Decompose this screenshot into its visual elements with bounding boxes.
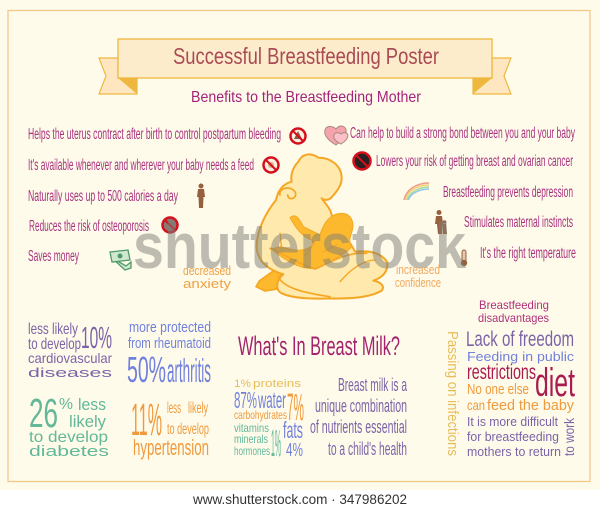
breast milk description: of nutrients essential: [310, 417, 407, 437]
disadvantages word cloud: diet: [535, 361, 575, 405]
left benefits list: [28, 126, 281, 265]
icon: money: [110, 250, 131, 270]
disadvantages word cloud: for breastfeeding: [467, 429, 559, 444]
stat: rheumatoid arthritis: more protected: [129, 319, 211, 336]
disadvantages heading: disadvantages: [478, 311, 549, 325]
stat: cardiovascular diseases: cardiovascular: [28, 350, 112, 366]
watermark: shutterstock: [133, 210, 466, 282]
milk composition word cloud: hormones: [234, 444, 270, 458]
mother and baby illustration: [256, 154, 387, 299]
stat: cardiovascular diseases: [28, 320, 113, 380]
stat: rheumatoid arthritis: from rheumatoid: [128, 335, 211, 352]
milk composition word cloud: [234, 378, 304, 465]
left benefits list: Naturally uses up to 500 calories a day: [28, 188, 178, 205]
stat: hypertension: hypertension: [133, 435, 209, 460]
footer credit: www.shutterstock.com · 347986202: [192, 492, 407, 507]
left benefits list: Saves money: [28, 248, 79, 265]
label: increased confidence: [395, 262, 441, 290]
stat: cardiovascular diseases: diseases: [28, 365, 113, 380]
stat: hypertension: less: [167, 400, 181, 417]
milk composition word cloud: 1%: [234, 378, 251, 390]
breast milk description: Breast milk is a: [338, 375, 408, 395]
stat: cardiovascular diseases: 10%: [81, 320, 112, 355]
label: decreased anxiety: [183, 263, 232, 291]
stat: diabetes: to develop: [29, 429, 108, 446]
milk composition word cloud: water: [258, 387, 286, 413]
milk composition word cloud: carbohydrates: [234, 408, 287, 422]
stat: cardiovascular diseases: to develop: [28, 336, 81, 353]
label: increased confidence: increased: [396, 262, 440, 277]
stat: diabetes: diabetes: [29, 443, 109, 460]
icon: thermometer: [461, 250, 467, 266]
disadvantages word cloud: It is more difficult: [467, 414, 558, 429]
label: decreased anxiety: decreased: [183, 263, 231, 278]
disadvantages word cloud: feed the baby: [487, 397, 574, 414]
disadvantages word cloud: restrictions: [467, 361, 536, 384]
milk composition word cloud: 87%: [234, 387, 257, 413]
icon: no osteoporosis: [162, 218, 178, 232]
label: decreased anxiety: anxiety: [183, 276, 232, 291]
disadvantages word cloud: Feeding in public: [467, 349, 575, 364]
disadvantages word cloud: mothers to return: [467, 444, 561, 459]
stat: hypertension: 11%: [131, 394, 162, 445]
left benefits list: Helps the uterus contract after birth to control postpartum bleeding: [28, 126, 281, 143]
stat: diabetes: likely: [69, 412, 106, 431]
breast milk description: to a child's health: [328, 439, 407, 459]
left benefits list: It's available whenever and wherever your baby needs a feed: [28, 157, 254, 174]
milk composition word cloud: vitamins: [234, 421, 269, 435]
icon: no bleeding: [290, 128, 306, 144]
stat: rheumatoid arthritis: [127, 319, 211, 390]
right benefits list: [350, 125, 576, 262]
disadvantages word cloud: Passing on infections: [444, 331, 461, 456]
stat: hypertension: likely: [188, 400, 208, 417]
milk composition word cloud: proteins: [253, 378, 302, 390]
stat: diabetes: less: [78, 395, 106, 414]
milk composition word cloud: fats: [283, 417, 303, 443]
title ribbon: [99, 39, 511, 94]
stat: diabetes: %: [59, 396, 73, 413]
heading: what's in breast milk: What's In Breast Milk?: [238, 331, 400, 361]
milk composition word cloud: 1%: [271, 423, 281, 465]
disadvantages heading: [478, 298, 549, 325]
icon: woman figure: [197, 184, 205, 208]
icon: no cancer: [354, 152, 370, 170]
stat: rheumatoid arthritis: 50%: [127, 349, 166, 390]
stat: diabetes: [29, 390, 109, 460]
disadvantages word cloud: to work: [561, 417, 577, 456]
text: arthritis: [167, 352, 211, 389]
breast milk description: [310, 375, 408, 459]
subtitle: Benefits to the Breastfeeding Mother: [191, 89, 422, 106]
stat: cardiovascular diseases: less likely: [28, 321, 78, 338]
stat: diabetes: 26: [29, 390, 58, 436]
icon: no bottle: [264, 158, 278, 172]
label: increased confidence: confidence: [395, 275, 441, 290]
disadvantages heading: Breastfeeding: [479, 298, 549, 312]
disadvantages word cloud: No one else: [467, 381, 529, 398]
icon: mother and child: [435, 210, 447, 234]
breast milk description: unique combination: [315, 396, 407, 416]
disadvantages word cloud: [444, 328, 577, 459]
milk composition word cloud: minerals: [234, 432, 268, 446]
disadvantages word cloud: can: [467, 397, 485, 413]
milk composition word cloud: 4%: [286, 440, 303, 460]
left benefits list: Reduces the risk of osteoporosis: [29, 218, 149, 235]
title: Successful Breastfeeding Poster: [173, 43, 439, 69]
icon: hearts: [325, 126, 348, 145]
icon: rainbow: [404, 183, 429, 200]
stat: hypertension: to develop: [167, 421, 209, 438]
text: 7%: [287, 387, 304, 429]
